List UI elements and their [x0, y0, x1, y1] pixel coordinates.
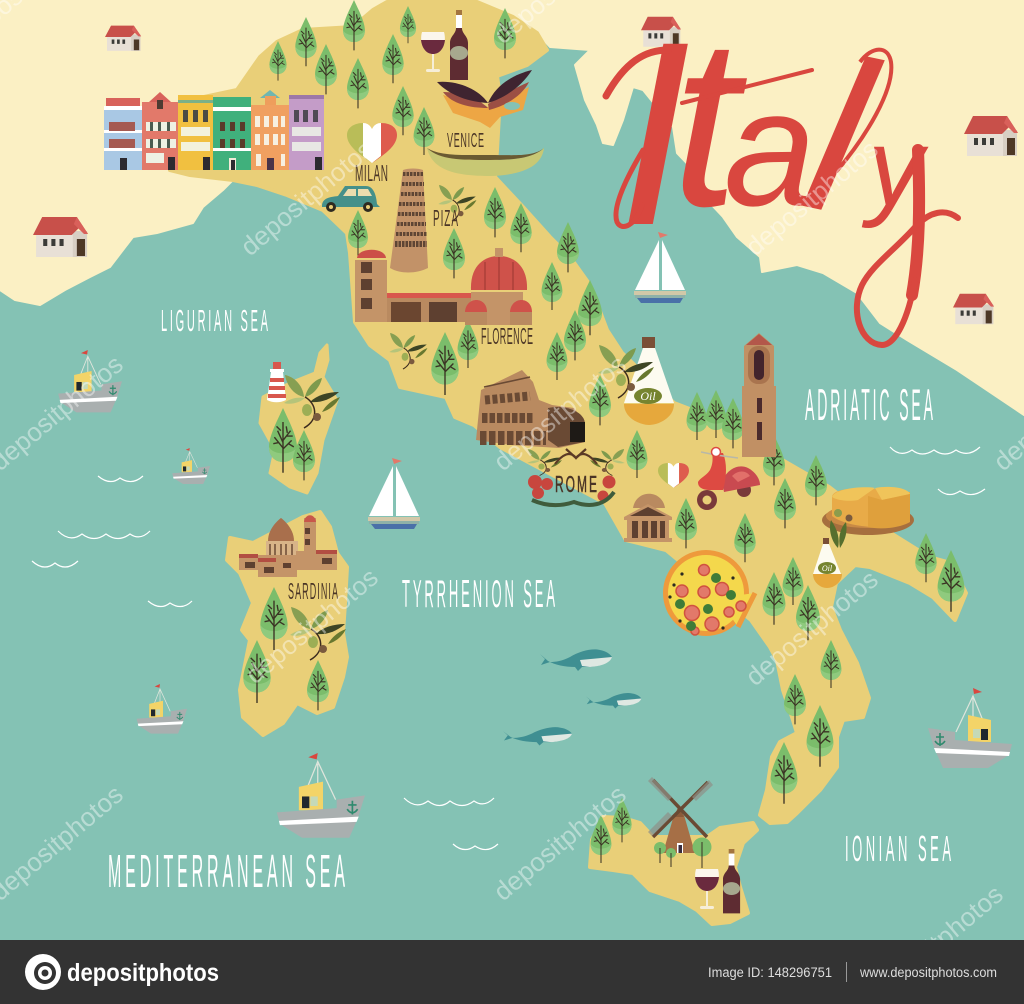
- olive sprig by cheese: [830, 509, 852, 548]
- olive branch: Corsica: [284, 375, 340, 428]
- small oil bottle: Oil: [822, 564, 833, 573]
- sea labels: TYRRHENION SEA: [402, 573, 555, 616]
- wine bottle and glass, north: [421, 10, 468, 80]
- watermarks: depositphotos: [240, 562, 384, 690]
- watermarks: depositphotos: [488, 349, 632, 477]
- title: l: [789, 10, 893, 262]
- footer url: www.depositphotos.com: [859, 965, 997, 980]
- Rome wreath with label: ROME: [555, 472, 597, 497]
- title: a: [724, 56, 816, 240]
- olive oil bottle: [624, 337, 674, 425]
- city labels: [288, 130, 533, 604]
- whales: [503, 649, 641, 746]
- Venetian mask: [437, 70, 532, 128]
- sea labels: LIGURIAN SEA: [161, 303, 268, 338]
- footer logo: depositphotos: [67, 959, 219, 987]
- Colosseum: [476, 370, 585, 448]
- footer logo: [25, 954, 219, 990]
- footer bar: [0, 940, 1024, 1004]
- waves: [32, 447, 985, 850]
- mainland Italy: [170, 2, 966, 823]
- watermarks: depositphotos: [740, 564, 884, 692]
- red scooter: [697, 448, 760, 510]
- sea labels: MEDITERRANEAN SEA: [108, 847, 345, 898]
- car: [322, 186, 380, 212]
- leaning tower of Pisa: [390, 168, 428, 272]
- title: y: [861, 106, 929, 229]
- city labels: PIZA: [433, 205, 458, 231]
- city labels: SARDINIA: [288, 578, 338, 604]
- gondola: [427, 148, 544, 176]
- city labels: FLORENCE: [481, 323, 533, 349]
- sea labels: [108, 303, 951, 898]
- fishing boats: [58, 350, 1012, 838]
- watermarks: depositphotos: [740, 134, 884, 262]
- bell tower: [742, 333, 776, 457]
- small Italian flag heart: [658, 463, 689, 488]
- cheese wheel on a plate: [822, 487, 914, 535]
- Sardinia church: [239, 515, 337, 577]
- Florence cathedral: [355, 248, 532, 325]
- sea labels: IONIAN SEA: [845, 828, 951, 869]
- city labels: MILAN: [355, 160, 388, 186]
- olive branch: Sardinia: [290, 607, 346, 660]
- sailing boats: [368, 232, 686, 529]
- neighbouring land: north-west: [0, 0, 400, 305]
- lighthouse: [267, 362, 286, 402]
- pizza: [663, 550, 755, 636]
- heart with Italian flag: [347, 123, 397, 163]
- windmill: [648, 777, 713, 868]
- small oil bottle: [813, 538, 842, 588]
- olive branch near oil: [598, 345, 654, 398]
- trees: [243, 0, 964, 863]
- wine bottle and glass, Sicily: [695, 849, 740, 913]
- footer image id: Image ID: 148296751: [708, 965, 832, 980]
- watermarks: depositphotos: [235, 134, 379, 262]
- olive branch: Florence: [389, 333, 427, 369]
- olive branch: Pisa: [438, 185, 476, 221]
- Corsica island: [260, 345, 337, 493]
- sea labels: ADRIATIC SEA: [805, 381, 933, 431]
- olive oil bottle: Oil: [640, 389, 656, 403]
- watermarks: depositphotos: [488, 779, 632, 907]
- neighbouring land: north-east: [470, 0, 1024, 415]
- Rome wreath with label: [527, 449, 625, 505]
- Sardinia island: [227, 512, 347, 735]
- houses: [33, 17, 1018, 324]
- city labels: VENICE: [447, 130, 484, 152]
- title: [606, 0, 958, 345]
- colourful Milan houses: [104, 90, 324, 170]
- Pantheon: [624, 494, 672, 542]
- Sicily: [590, 817, 757, 924]
- watermarks: depositphotos: [865, 879, 1009, 1004]
